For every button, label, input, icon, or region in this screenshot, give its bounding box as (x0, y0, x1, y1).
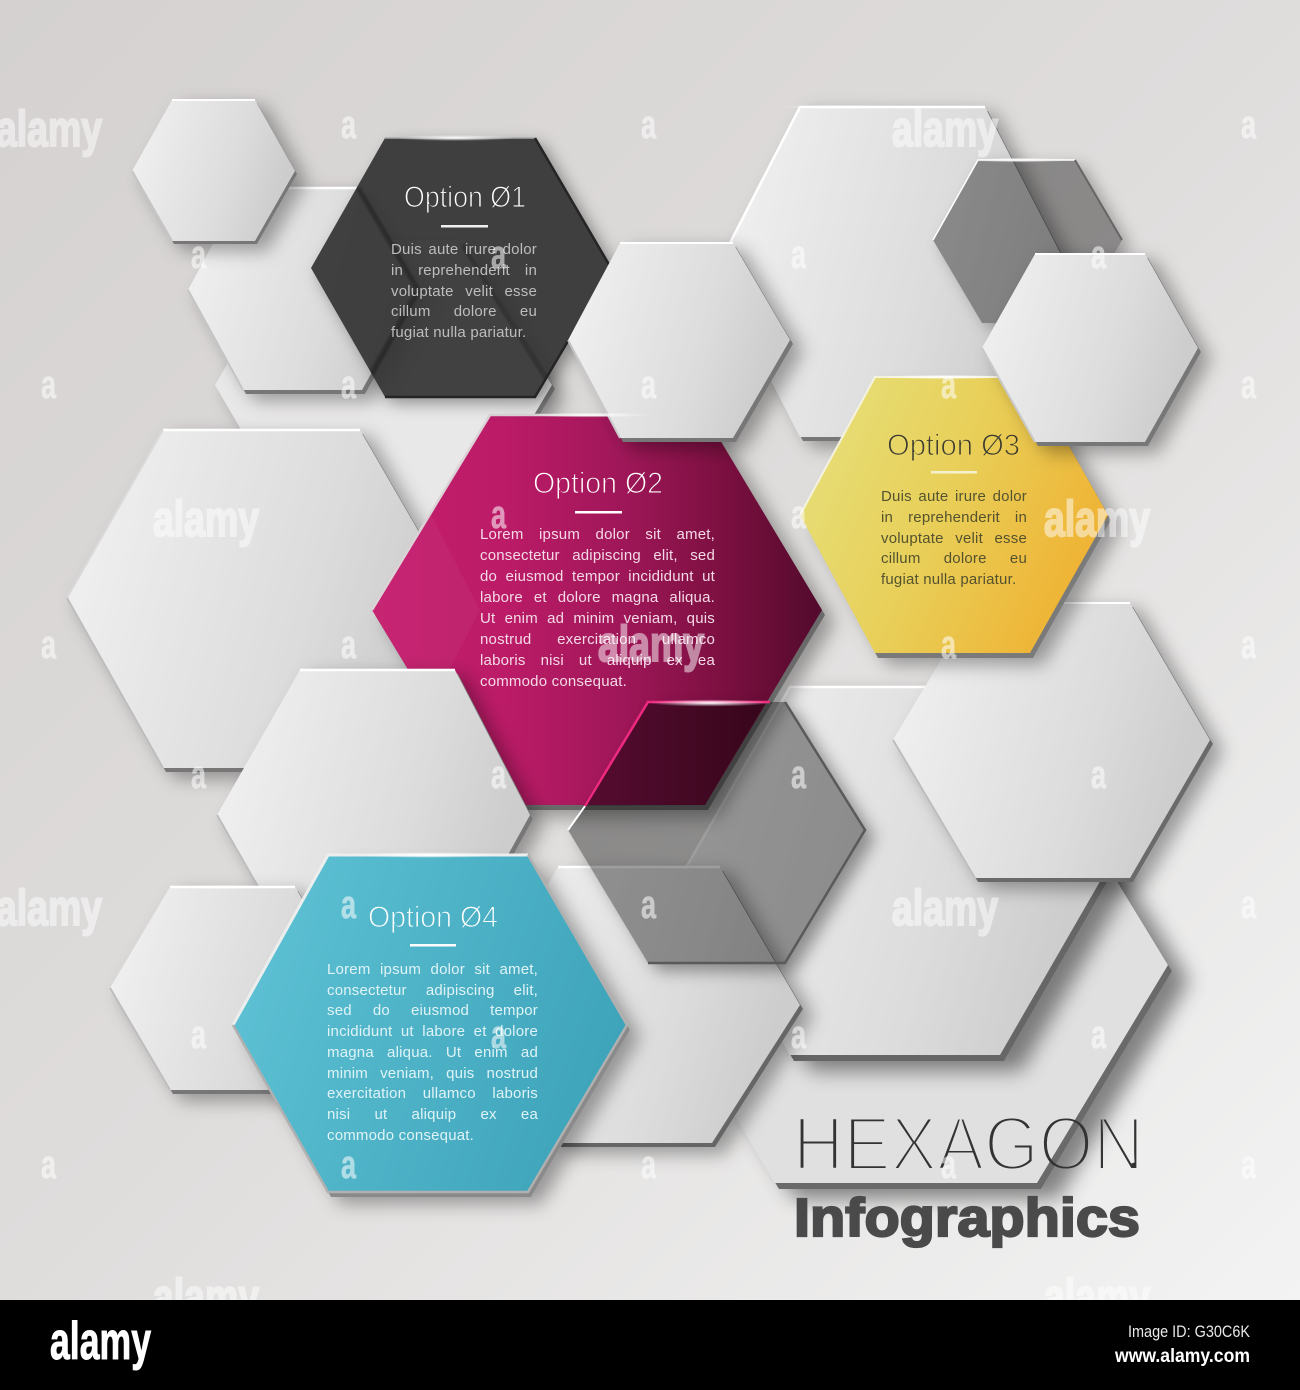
text block: option 03 (881, 488, 1027, 588)
hexagon: top right white (982, 254, 1201, 446)
watermark: alamy wordmarks: alamy (153, 1269, 259, 1325)
footer: website: www.alamy.com (1114, 1346, 1250, 1367)
watermark: alamy wordmarks: alamy (892, 880, 998, 936)
heading: option 02: Option Ø2 (533, 467, 663, 500)
hexagon: top centre white (568, 243, 793, 442)
title: HEXAGON: HEXAGON (793, 1102, 1144, 1187)
hexagon: large bottom right (644, 750, 1172, 1189)
watermark: small a marks: a (941, 623, 957, 667)
watermark: small a marks: a (341, 883, 357, 927)
text block: option 01 (391, 241, 537, 341)
watermark: small a marks: a (1241, 623, 1257, 667)
hexagon: large left (67, 430, 460, 772)
watermark: small a marks: a (641, 103, 657, 147)
hexagon: bottom centre (478, 867, 803, 1147)
watermark: small a marks: a (641, 883, 657, 927)
text block: option 02: labore et dolore magna aliqua. (480, 589, 715, 606)
watermark: small a marks: a (941, 363, 957, 407)
watermark: small a marks: a (1091, 233, 1107, 277)
text block: option 02: do eiusmod tempor incididunt ut (480, 568, 715, 585)
title: Infographics: Infographics (794, 1188, 1140, 1248)
heading: option 01: Option Ø1 (404, 181, 526, 214)
hexagon: large lower right (684, 687, 1110, 1061)
text block: option 04: minim veniam, quis nostrud (327, 1065, 538, 1082)
panel: option 03 yellow hexagon (800, 377, 1111, 658)
text block: option 04: sed do eiusmod tempor (327, 1002, 538, 1019)
watermark: small a marks: a (491, 233, 507, 277)
text block: option 04: Lorem ipsum dolor sit amet, (327, 961, 538, 978)
watermark: small a marks: a (491, 1013, 507, 1057)
text block: option 04: consectetur adipiscing elit, (327, 982, 538, 999)
hexagon: small lower left (110, 887, 358, 1094)
text block: option 04: incididunt ut labore et dolore (327, 1023, 538, 1040)
panel: option 01 dark hexagon (311, 138, 618, 403)
watermark: small a marks: a (341, 103, 357, 147)
text block: option 03: in reprehenderit in (881, 509, 1027, 526)
watermark: alamy wordmarks: alamy (0, 880, 102, 936)
hexagon: large top right (715, 107, 1073, 441)
watermark: small a marks: a (341, 363, 357, 407)
text block: option 03: fugiat nulla pariatur. (881, 571, 1016, 588)
watermark: alamy wordmarks: alamy (153, 491, 259, 547)
watermark: small a marks (41, 103, 1257, 1187)
panel: option 04 blue hexagon (233, 855, 630, 1197)
watermark: alamy wordmarks: alamy (1044, 1269, 1150, 1325)
hexagon: lower left medium (217, 670, 533, 964)
heading: option 03: Option Ø3 (887, 429, 1020, 462)
watermark: alamy wordmarks: alamy (892, 101, 998, 157)
watermark: small a marks: a (1241, 363, 1257, 407)
text block: option 04: nisi ut aliquip ex ea (327, 1106, 538, 1123)
watermark: alamy wordmarks (0, 101, 1150, 1325)
text block: option 04: commodo consequat. (327, 1127, 474, 1144)
hexagon: behind option 01 (215, 240, 555, 534)
text block: option 03: Duis aute irure dolor (881, 488, 1027, 505)
text block: option 04: magna aliqua. Ut enim ad (327, 1044, 538, 1061)
watermark: small a marks: a (791, 233, 807, 277)
hexagon: upper left medium (188, 188, 421, 394)
text block: option 01: Duis aute irure dolor (391, 241, 537, 258)
text block: option 02: laboris nisi ut aliquip ex ea (480, 652, 715, 669)
watermark: small a marks: a (941, 1143, 957, 1187)
watermark: small a marks: a (1091, 1013, 1107, 1057)
watermark: small a marks: a (1091, 753, 1107, 797)
text block: option 04 (327, 961, 538, 1144)
watermark: small a marks: a (191, 753, 207, 797)
text block: option 02: commodo consequat. (480, 673, 627, 690)
watermark: small a marks: a (1241, 103, 1257, 147)
watermark: small a marks: a (41, 1143, 57, 1187)
watermark: small a marks: a (791, 753, 807, 797)
watermark: small a marks: a (491, 493, 507, 537)
text block: option 03: voluptate velit esse (881, 530, 1027, 547)
watermark: small a marks: a (641, 363, 657, 407)
hexagon: translucent gray centre (568, 702, 875, 971)
watermark: small a marks: a (191, 233, 207, 277)
watermark: small a marks: a (41, 623, 57, 667)
text block: option 01: fugiat nulla pariatur. (391, 324, 526, 341)
hexagon: right (893, 603, 1213, 882)
footer band (0, 1300, 1300, 1390)
text block: option 03: cillum dolore eu (881, 550, 1027, 567)
panel: option 02 magenta hexagon (372, 415, 825, 810)
watermark: small a marks: a (791, 493, 807, 537)
text block: option 02: Ut enim ad minim veniam, quis (480, 610, 715, 627)
text block: option 02: consectetur adipiscing elit, sed (480, 547, 715, 564)
footer: image id: Image ID: G30C6K (1128, 1322, 1251, 1341)
watermark: alamy wordmarks: alamy (598, 616, 704, 672)
watermark: small a marks: a (791, 1013, 807, 1057)
watermark: alamy wordmarks: alamy (1044, 491, 1150, 547)
watermark: alamy wordmarks: alamy (0, 101, 102, 157)
footer logo: alamy: alamy (50, 1312, 151, 1371)
text block: option 02 (480, 526, 715, 690)
watermark: small a marks: a (1241, 1143, 1257, 1187)
watermark: small a marks: a (1241, 883, 1257, 927)
text block: option 01: in reprehenderit in (391, 262, 537, 279)
watermark: small a marks: a (341, 623, 357, 667)
text block: option 01: voluptate velit esse (391, 283, 537, 300)
watermark: small a marks: a (491, 753, 507, 797)
heading: option 04: Option Ø4 (368, 901, 498, 934)
text block: option 04: exercitation ullamco laboris (327, 1085, 538, 1102)
text block: option 02: nostrud exercitation ullamco (480, 631, 715, 648)
watermark: small a marks: a (191, 1013, 207, 1057)
hexagon: translucent gray top right (933, 160, 1130, 329)
text block: option 01: cillum dolore eu (391, 303, 537, 320)
text block: option 02: Lorem ipsum dolor sit amet, (480, 526, 715, 543)
watermark: small a marks: a (41, 363, 57, 407)
watermark: small a marks: a (641, 1143, 657, 1187)
edge glints (175, 105, 1070, 889)
hexagon: small top left (132, 100, 297, 244)
watermark: small a marks: a (341, 1143, 357, 1187)
